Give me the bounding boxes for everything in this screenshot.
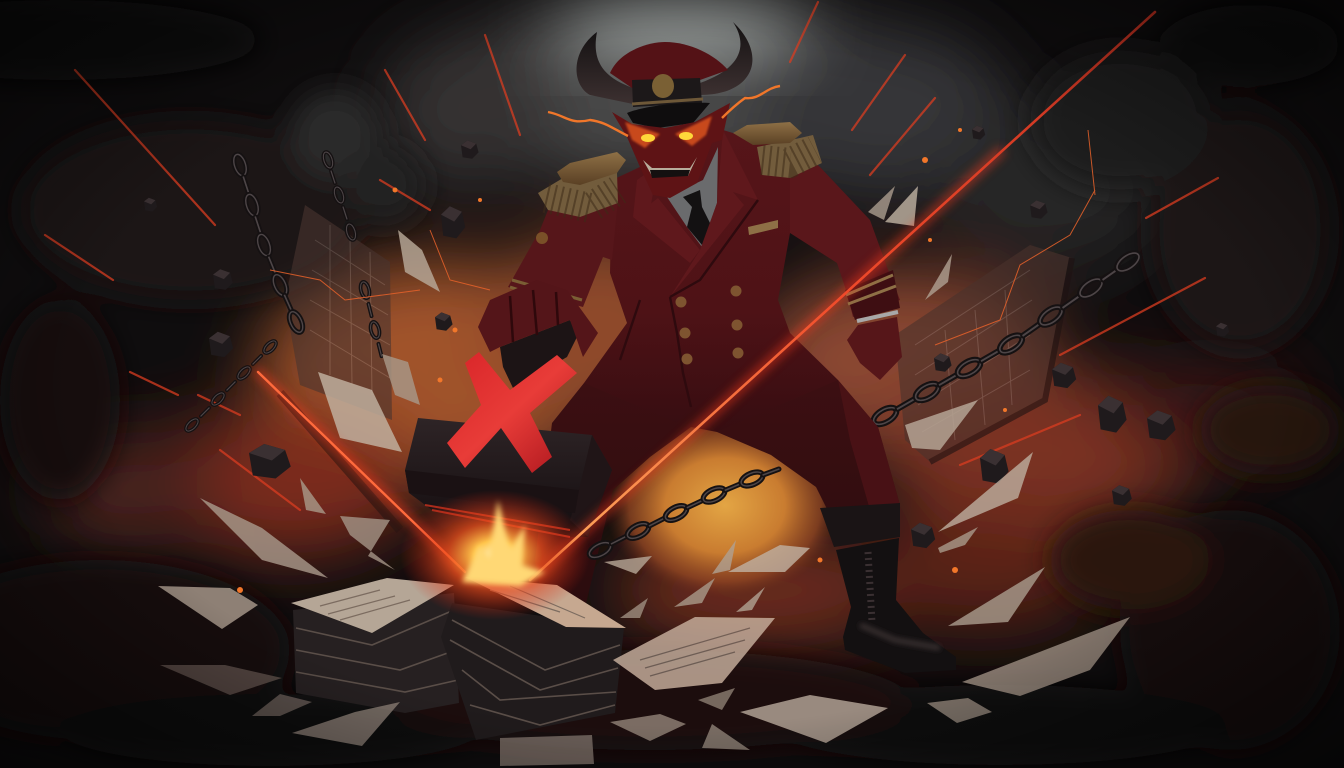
sleeve patch (536, 232, 548, 244)
left fist (478, 280, 598, 357)
stamp block (405, 418, 612, 537)
figure: demon officer (508, 22, 956, 688)
floor papers (158, 586, 992, 766)
stamp handle (500, 320, 577, 388)
shirt and tie (667, 147, 718, 247)
chain: lower left (184, 339, 278, 433)
right fist (847, 317, 902, 380)
red streaks behind figure (45, 2, 1218, 510)
paper stacks (291, 577, 626, 740)
jacket folds (620, 200, 758, 407)
right arm (790, 140, 900, 317)
left arm (508, 200, 618, 307)
jacket (584, 130, 838, 432)
chest badge (748, 220, 778, 235)
chain: upper left (231, 153, 305, 334)
right boot (820, 503, 956, 673)
right stack (441, 577, 626, 740)
flying papers (200, 186, 1130, 696)
right epaulette (733, 122, 822, 178)
bottom chain (587, 466, 782, 560)
lapels (633, 130, 758, 297)
left epaulette (538, 152, 626, 217)
red laser beams (258, 12, 1155, 580)
left stack (291, 578, 459, 713)
flames at eyes (548, 86, 780, 136)
flying rocks (144, 126, 1229, 548)
chain: right (871, 250, 1142, 428)
calendar panel: left (280, 205, 400, 530)
officer cap (610, 42, 728, 128)
right cuff (845, 270, 900, 321)
stamp (405, 280, 612, 537)
stamp impact explosion (400, 490, 590, 620)
calendar panel: right (895, 245, 1072, 462)
horns (577, 22, 752, 104)
legs (535, 380, 900, 688)
lightning and embers (237, 128, 1095, 653)
demon mask face (612, 103, 730, 198)
jacket buttons (676, 286, 744, 364)
red X (447, 352, 577, 473)
chains: background (184, 151, 1142, 433)
chain: upper middle (322, 151, 384, 358)
